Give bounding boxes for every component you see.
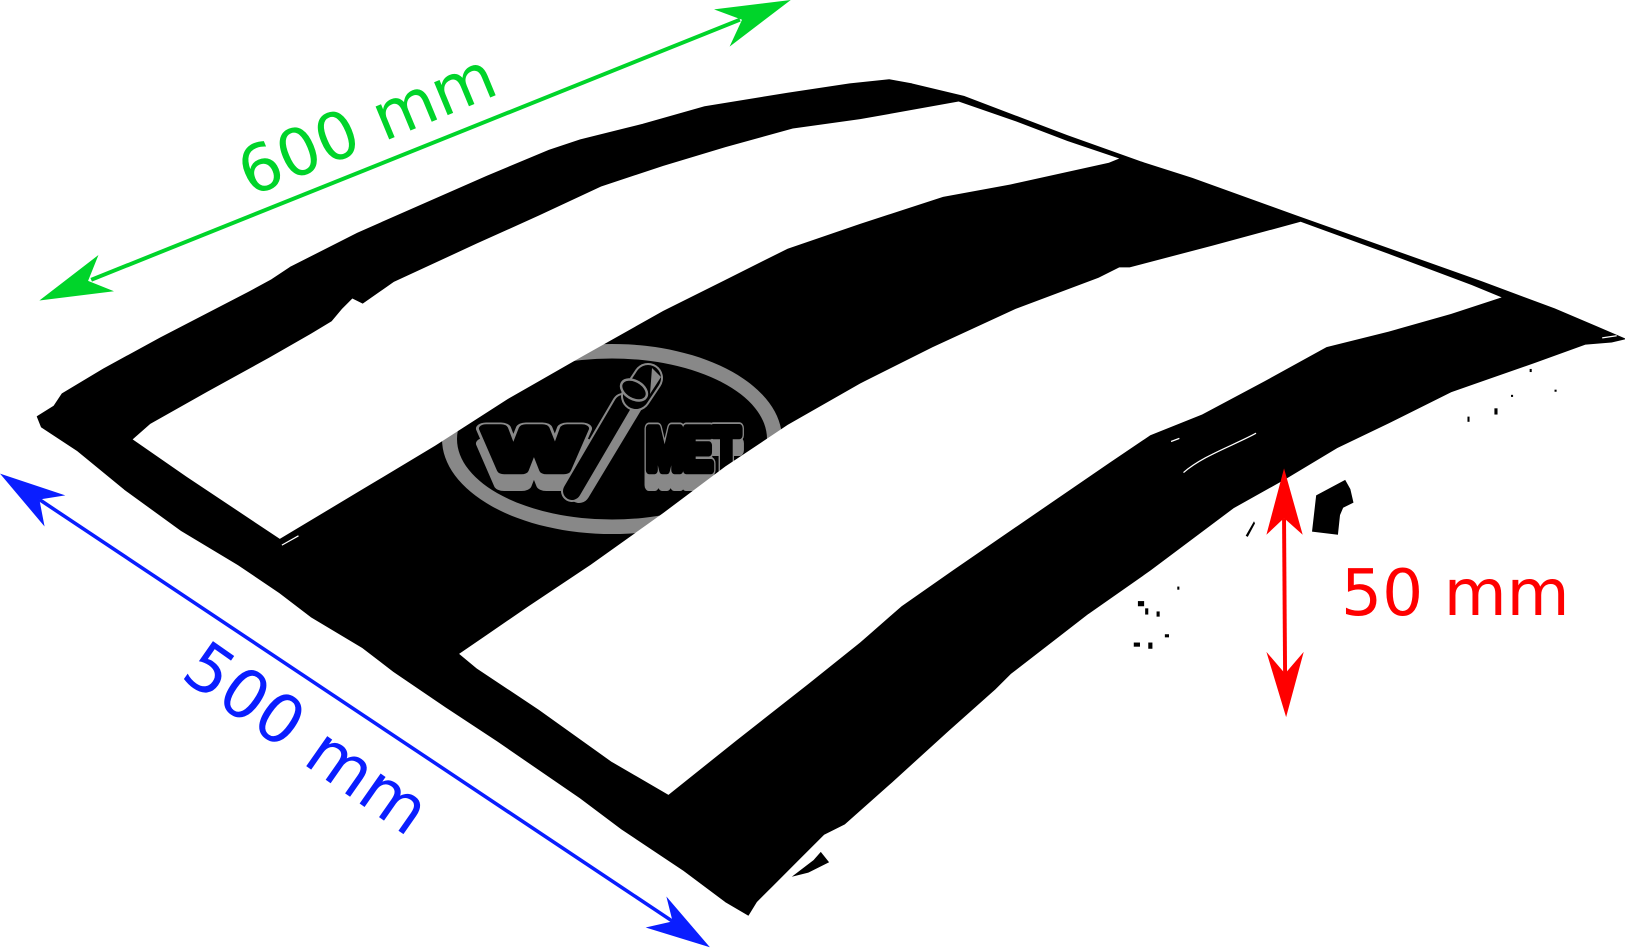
logo letters (486, 416, 740, 483)
logo letter outline: W (486, 416, 583, 483)
bottom white window (459, 222, 1502, 795)
plate: white windows and cracks (133, 102, 1617, 795)
logo: WIMET oval emblem (442, 344, 782, 534)
red arrow (1266, 468, 1304, 717)
dimension: 500 mm (blue) (0, 474, 710, 947)
logo ring (442, 344, 782, 534)
logo letter shadow: MET (646, 431, 740, 498)
logo letter shadow (486, 431, 740, 498)
dimension: 50 mm (red) (1266, 468, 1570, 717)
logo letters: W (486, 416, 583, 483)
blue arrow (0, 474, 710, 947)
green label: 600 mm (227, 39, 507, 212)
logo letter outline (486, 416, 740, 483)
logo letters: MET (646, 416, 740, 483)
blue label: 500 mm (170, 626, 444, 851)
logo letter outline: MET (646, 416, 740, 483)
surface cracks (282, 336, 1617, 545)
debris marks on the right (792, 369, 1557, 877)
red label: 50 mm (1341, 556, 1570, 631)
green arrow (39, 0, 791, 301)
logo letter shadow: W (486, 431, 583, 498)
logo pencil (572, 368, 661, 492)
dimension: 600 mm (green) (39, 0, 791, 301)
top white window (133, 102, 1119, 539)
